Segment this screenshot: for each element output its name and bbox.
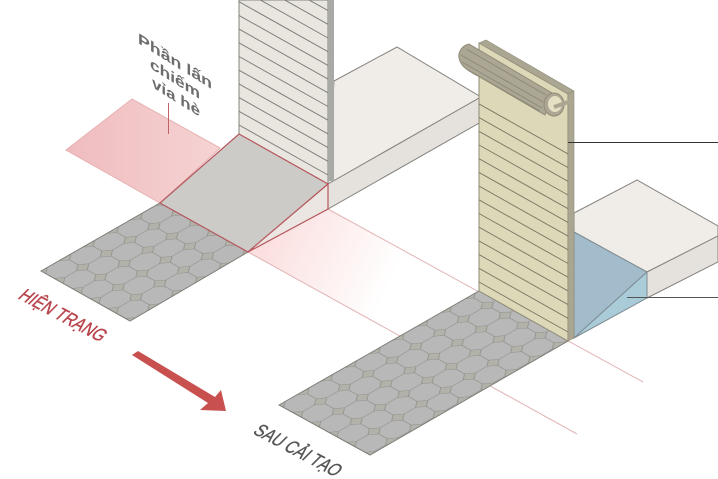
label: encroachment: vỉa hè [152,74,200,121]
panel: after renovation scene [248,40,718,479]
step left [328,47,481,209]
paving right [279,291,568,455]
step right [574,180,718,298]
leader line [168,103,170,134]
leader line [568,142,718,144]
shutter right [479,40,574,341]
leader line [627,296,718,298]
panel: current state scene [13,0,643,434]
label: current state: HIỆN TRẠNG [13,285,113,346]
arrow [132,351,226,411]
label: encroachment [138,30,212,121]
ramp encroaching [160,134,328,252]
label: encroachment: Phần lấn [138,30,212,93]
encroachment zone [66,99,220,203]
roller [459,44,574,116]
fading sidewalk band [248,209,643,434]
blue ramp [574,232,647,338]
label: encroachment: chiếm [150,55,200,103]
shutter left [239,0,334,184]
paving left [41,203,248,321]
